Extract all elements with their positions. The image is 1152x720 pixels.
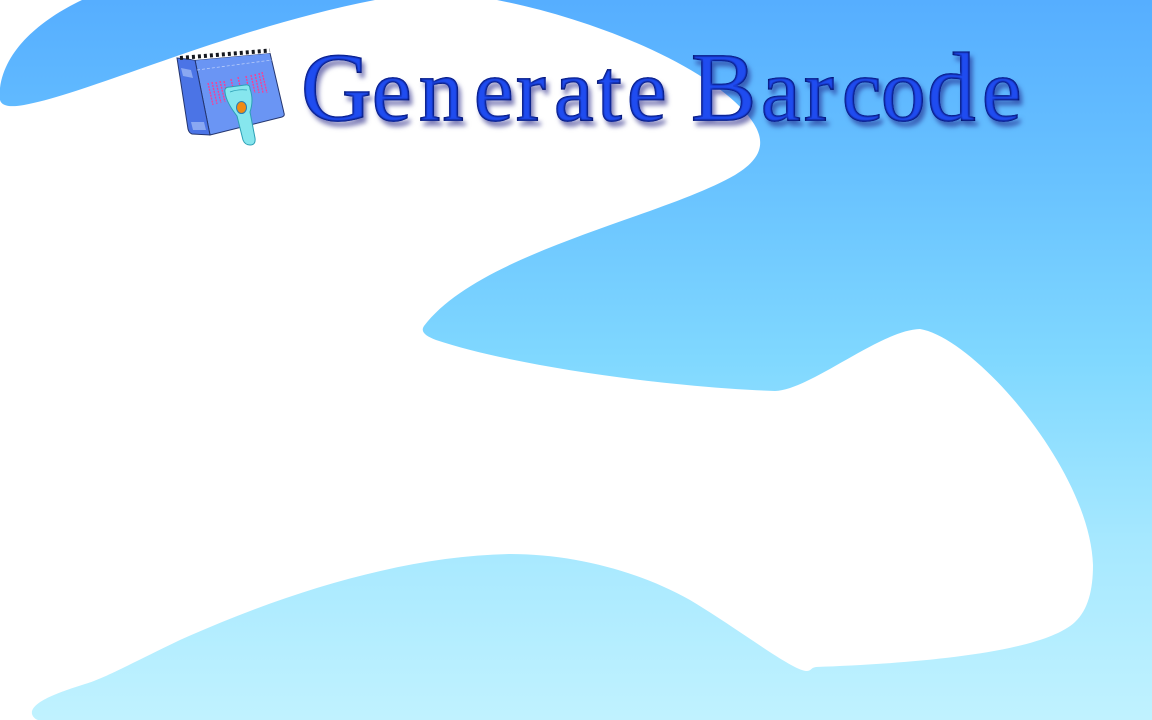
scanner handle and head <box>225 85 255 145</box>
checkered page edge <box>177 48 271 60</box>
white top-left corner <box>0 0 82 88</box>
book cover <box>195 53 284 135</box>
title: G <box>301 34 372 142</box>
title: B <box>691 34 756 142</box>
dashed cover line <box>197 60 272 70</box>
title: e <box>982 42 1022 140</box>
icon: barcode scanner over book <box>177 48 284 145</box>
title: enerate <box>372 42 667 140</box>
scanner head arc <box>230 90 247 92</box>
title: d <box>927 34 976 141</box>
title: arco <box>761 42 926 140</box>
scanner button <box>236 102 246 114</box>
red barcode lines <box>208 72 267 105</box>
spine labels <box>181 68 206 130</box>
book spine <box>177 58 210 135</box>
